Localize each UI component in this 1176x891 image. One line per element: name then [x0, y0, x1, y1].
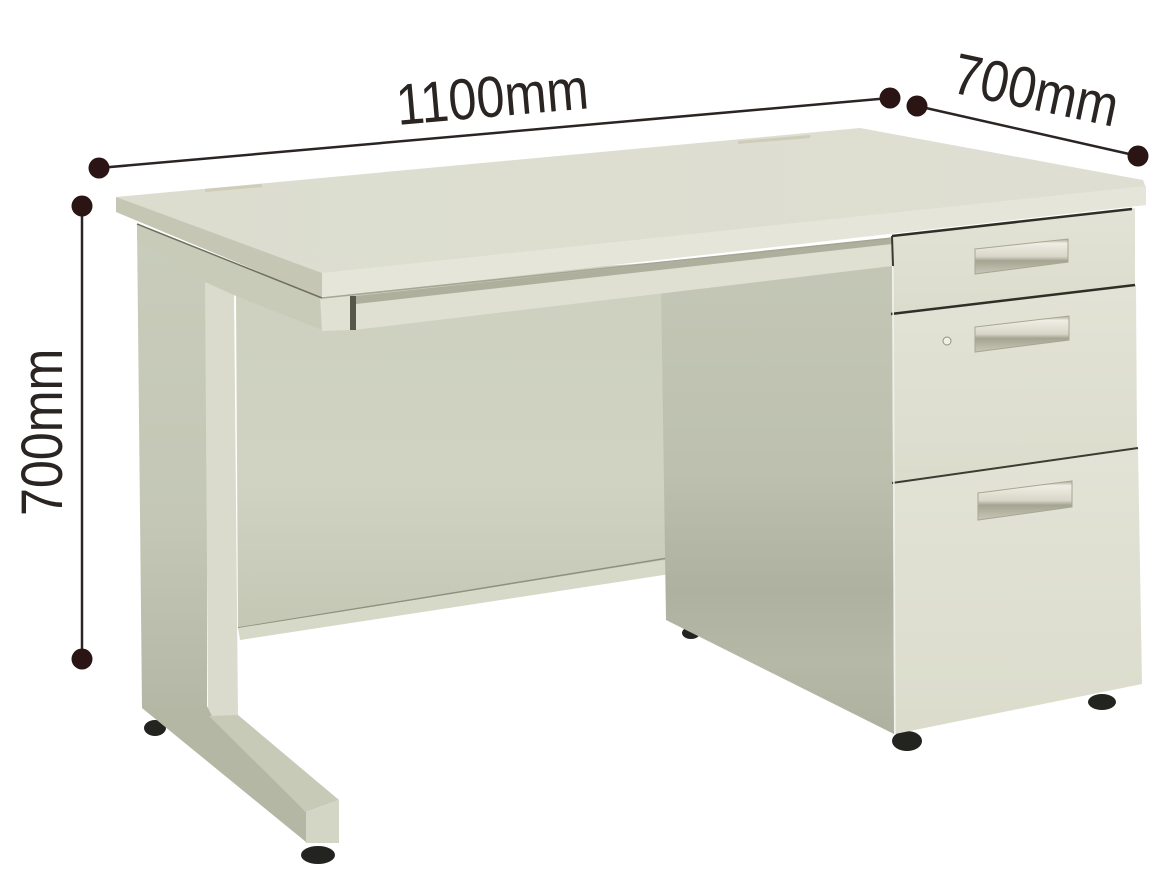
handle 2 [975, 316, 1069, 352]
handle 1 [975, 239, 1068, 274]
cable slots [205, 135, 810, 192]
handle 3 [978, 481, 1072, 520]
drawer 1 [893, 208, 1135, 314]
dimension: width 1100mm: 1100mm [393, 56, 591, 138]
leg foot top [209, 715, 339, 812]
left leg side panel [137, 225, 207, 722]
leg foot front [306, 800, 339, 843]
dimension: height 700mm: 700mm [11, 349, 75, 516]
dimension: depth 700mm [906, 42, 1148, 166]
icon: lock [943, 337, 951, 345]
drawer 3 [893, 448, 1142, 734]
dimension: height 700mm [11, 196, 92, 670]
modesty panel [236, 262, 668, 628]
desktop front edge [322, 186, 1146, 298]
leg foot side [142, 706, 306, 842]
desk [116, 128, 1146, 864]
drawer 2 [893, 285, 1137, 484]
pedestal side panel [661, 255, 894, 734]
dimension: depth 700mm: 700mm [947, 42, 1124, 139]
left leg front strip [205, 282, 238, 716]
desktop surface [116, 128, 1146, 275]
lower rail [238, 560, 670, 640]
dimension: width 1100mm [88, 56, 900, 178]
keyboard drawer [354, 240, 892, 330]
icon: feet [144, 627, 1116, 864]
top rail under desktop [137, 225, 322, 330]
desktop left edge [116, 197, 322, 298]
